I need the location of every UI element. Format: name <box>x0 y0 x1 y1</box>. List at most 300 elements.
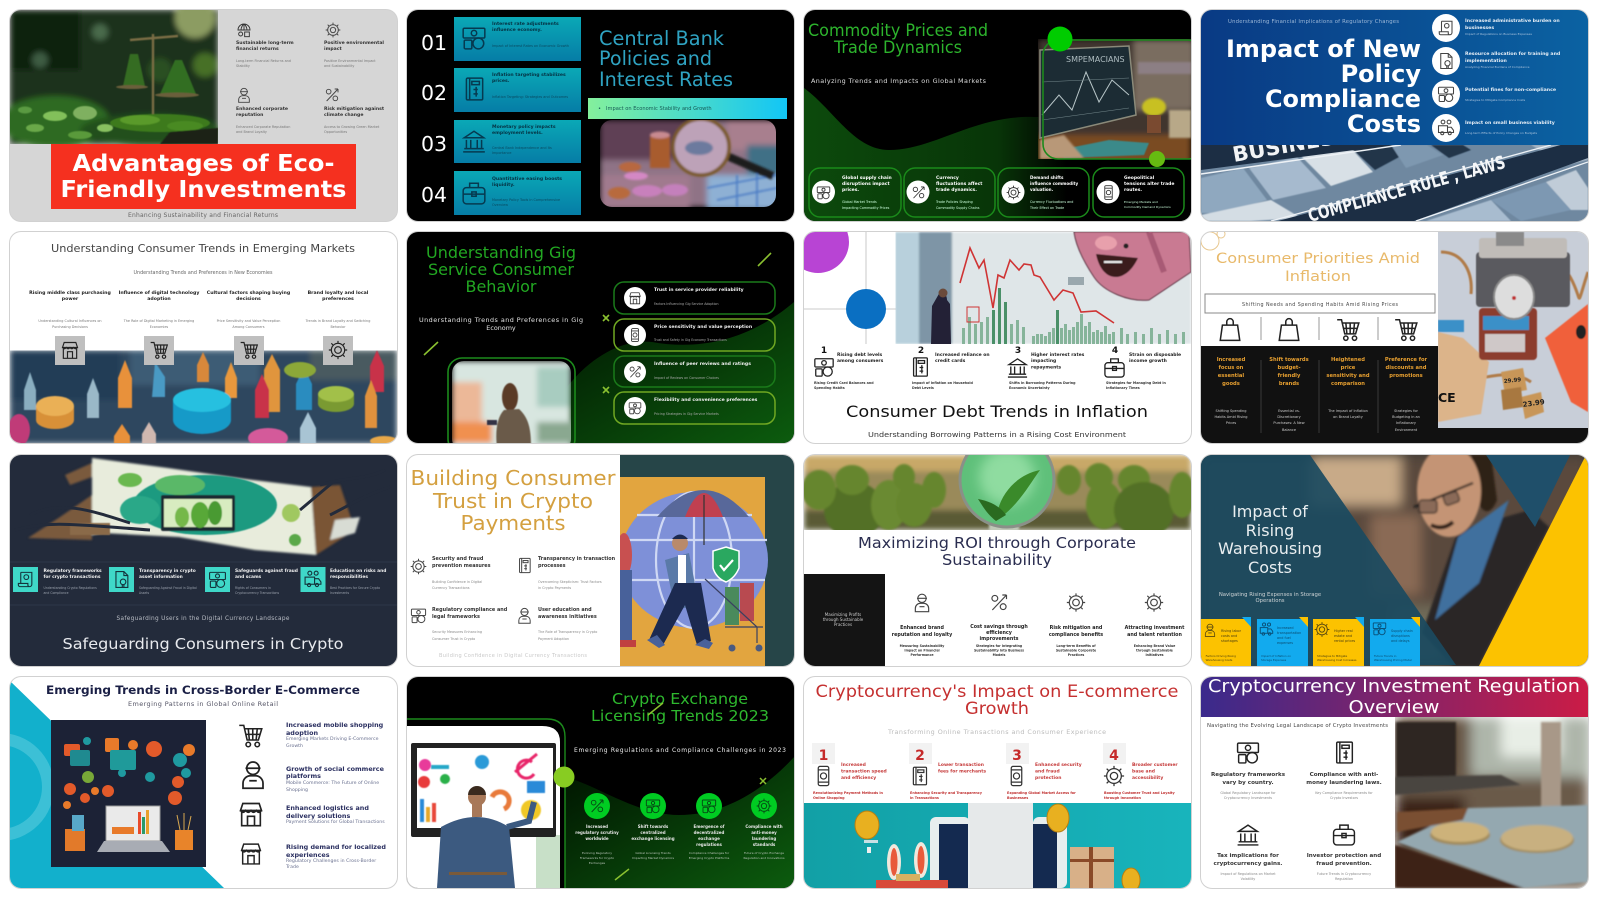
column 3: Among Consumers <box>232 325 265 329</box>
subtitle: Enhancing Sustainability and Financial Returns <box>128 212 278 219</box>
column 1: Rising middle class purchasing <box>29 290 111 296</box>
column 2: Sustainability into Business <box>974 648 1024 652</box>
title <box>1218 502 1322 577</box>
column 2: efficiency <box>986 630 1013 636</box>
list item 04: 04 <box>421 183 447 207</box>
item: decentralized <box>689 793 730 860</box>
title: Cryptocurrency's Impact on E-commerce <box>816 682 1178 701</box>
decorative bubbles <box>1201 230 1225 250</box>
title: Warehousing <box>1218 539 1322 558</box>
item 1: Spending Habits <box>814 386 845 390</box>
tile 2: Increased <box>1277 626 1294 630</box>
title: Understanding Gig <box>426 243 576 262</box>
item 2: Increased reliance on <box>935 352 990 358</box>
item: social commerce: platforms <box>286 772 321 780</box>
column 2: Balance <box>1282 428 1296 432</box>
column 4: promotions <box>1389 373 1423 379</box>
tile 3: Higher real <box>1334 629 1353 633</box>
title: Policies and <box>599 47 712 70</box>
geometric overlays <box>1201 455 1588 666</box>
title <box>599 27 733 91</box>
column 2: Discretionary <box>1277 415 1301 419</box>
subtitle: Understanding Financial Implications of Regulatory Changes <box>1228 19 1399 25</box>
title <box>816 682 1178 718</box>
step 1: transaction speed <box>841 768 887 774</box>
column 4: Enhancing Brand Value <box>1134 644 1175 648</box>
column 2: The Role of Digital Marketing in Emerging <box>123 319 194 323</box>
column 2: Economies <box>150 325 168 329</box>
tile 2: expenses <box>1277 641 1293 645</box>
subtitle <box>1219 592 1321 604</box>
list item 02: prices. <box>492 78 510 84</box>
column 3: decisions <box>236 296 261 302</box>
subtitle: Understanding Borrowing Patterns in a Rising Cost Environment <box>868 430 1126 439</box>
list item 01: 01 <box>421 31 447 55</box>
item: tax: cryptocurrency gains. <box>1214 861 1282 867</box>
item: safeguards: Safeguards against fraud <box>235 568 298 574</box>
image: coins on papers <box>1395 717 1588 888</box>
item: positive environmental impact: Positive Environmental Impact <box>324 59 376 63</box>
column 2: Purchases: A New <box>1273 421 1305 425</box>
item: localized experiences <box>242 843 386 870</box>
step 4: through Innovation <box>1104 796 1142 800</box>
item: administrative burden: Increased administrative burden on <box>1465 18 1560 24</box>
item: regulatory <box>411 607 508 641</box>
title: Consumer Priorities Amid <box>1216 251 1420 267</box>
column 4: preferences <box>322 296 354 302</box>
column 4: Inflationary <box>1396 421 1416 425</box>
item: tax <box>1214 825 1282 881</box>
item: localized experiences: experiences <box>286 851 330 859</box>
card: geopolitical <box>1093 168 1184 217</box>
item: risk mitigation <box>324 89 385 134</box>
item: regulatory frameworks: for crypto transactions <box>44 574 101 580</box>
item: positive environmental impact: impact <box>324 46 342 52</box>
column 3 <box>207 290 290 365</box>
step 1: Online Shopping <box>813 796 845 800</box>
gradient header title <box>1201 676 1588 718</box>
image: compliance rule bands <box>1201 123 1588 221</box>
list item 03 <box>421 120 581 163</box>
card: geopolitical: Geopolitical <box>1124 175 1155 181</box>
item: decentralized: Emergence of <box>694 824 725 829</box>
item: education: responsibilities <box>330 574 368 580</box>
item: investor protection: fraud prevention. <box>1316 861 1372 867</box>
subtitle: Transforming Online Transactions and Consumer Experience <box>887 728 1106 736</box>
step 3 <box>1006 743 1082 800</box>
item: AML: standards <box>753 842 776 847</box>
panel: Impact of New Policy Compliance Costs <box>1201 10 1588 221</box>
card: supply chain: Global Market Trends <box>842 200 877 204</box>
item: enhanced corporate reputation: reputation <box>236 112 263 118</box>
item: regulatory frameworks: and Compliance <box>44 591 69 595</box>
item: transparency: processes <box>538 563 566 569</box>
item: positive environmental impact <box>324 23 384 68</box>
step 2 <box>909 743 986 800</box>
column 3: Practices <box>1068 653 1084 657</box>
image: crypto coins and shopping <box>804 803 1191 888</box>
item: social commerce: Growth of social commerce <box>286 765 385 773</box>
item: investor protection: Future Trends in Cryptocurrency <box>1317 872 1371 876</box>
tile 4: and delays <box>1391 639 1410 643</box>
item 4: income growth <box>1129 358 1167 364</box>
list item 04: Monetary Policy Tools in Comprehensive <box>492 198 560 202</box>
tile 4 <box>1370 617 1420 666</box>
column 1: reputation and loyalty <box>892 632 953 638</box>
list item 04: Overview <box>492 203 508 207</box>
panel: Emerging Trends in Cross-Border E-Commerce <box>10 677 397 888</box>
panel: Safeguarding Consumers in Crypto <box>10 455 397 666</box>
item: localized experiences: Regulatory Challenges in Cross-Border <box>286 858 376 864</box>
item: small business viability: Long-term Effects of Policy Changes on Budgets <box>1465 131 1537 135</box>
panel: Understanding Gig Service Consumer Behavior <box>407 232 794 443</box>
item: risk mitigation: climate change <box>324 112 363 118</box>
title <box>591 690 769 725</box>
item 3: 3 <box>1015 346 1021 356</box>
item: enhanced corporate reputation <box>236 88 290 134</box>
card: supply chain <box>809 168 901 217</box>
column 3: sensitivity and <box>1326 373 1370 379</box>
item: social commerce: Mobile Commerce: The Future of Online <box>286 780 379 786</box>
item: transparency: in Crypto Payments <box>538 586 571 590</box>
item: transparency: Transparency in transaction <box>538 556 616 562</box>
list item 02 <box>421 68 581 112</box>
bottom black band <box>1201 346 1588 443</box>
tile 3: Strategies to Mitigate <box>1317 654 1348 658</box>
title: Compliance <box>1265 85 1421 113</box>
image: camera and price tags: 29.99 <box>1504 377 1522 385</box>
item: price: Trust and Safety in Gig Economy Transactions <box>653 338 727 342</box>
column 4: Preference for <box>1385 357 1428 363</box>
tile 2 <box>1257 617 1308 666</box>
step 1: 1 <box>819 748 828 764</box>
item: education <box>519 607 597 641</box>
item: regulatory frameworks: Global Regulatory Landscape for <box>1220 791 1276 795</box>
decorative accents <box>554 703 766 880</box>
title: Safeguarding Consumers in Crypto <box>62 635 344 653</box>
item: centralized licensing: Impacting Market Dynamics <box>632 856 674 860</box>
item: resource allocation: implementation <box>1465 58 1507 64</box>
step 4: accessibility <box>1132 775 1163 781</box>
item: education: awareness initiatives <box>538 614 597 620</box>
column 1 <box>892 594 953 657</box>
column 4 <box>305 290 370 365</box>
item: peer reviews <box>614 356 775 387</box>
item: security <box>411 556 491 590</box>
step 4 <box>1103 743 1178 800</box>
item: administrative burden <box>1432 14 1560 42</box>
card: currency: Commodity Supply Chains <box>936 206 980 210</box>
item: compliance: Compliance with anti- <box>1310 772 1379 778</box>
column 4: and talent retention <box>1127 632 1182 638</box>
item: safeguards: Rights of Consumers in <box>235 586 271 590</box>
image: camera and price tags: 23.99 <box>1522 398 1545 409</box>
column 2: improvements <box>980 636 1019 642</box>
item 2: Debt Levels <box>912 386 934 390</box>
item: AML: anti-money <box>751 830 777 835</box>
title: Growth <box>965 699 1029 718</box>
column 1: focus on <box>1219 365 1244 371</box>
item: scrutiny: Evolving Regulatory <box>582 851 612 855</box>
item: mobile shopping: Increased mobile shopping <box>286 721 384 729</box>
column 3: Cultural factors shaping buying <box>207 290 290 296</box>
item: logistics: delivery solutions <box>286 812 350 820</box>
column 1 <box>29 290 111 365</box>
item: logistics: Enhanced logistics and <box>286 804 369 812</box>
blue header panel <box>1201 10 1588 145</box>
step 4: Boosting Customer Trust and Loyalty <box>1104 791 1176 795</box>
item: investor protection: Regulation <box>1335 877 1353 881</box>
tile 2: Storage Expenses <box>1261 658 1287 662</box>
title: Interest Rates <box>599 68 733 91</box>
tile 2: Impact of Inflation on <box>1261 654 1291 658</box>
footer note: Building Confidence in Digital Currency Transactions <box>439 653 587 659</box>
item: tax: Tax implications for <box>1217 853 1279 859</box>
list item 01: Interest rate adjustments <box>492 21 559 27</box>
gradient header title: Overview <box>1348 697 1440 718</box>
tile 1: costs and <box>1221 634 1237 638</box>
side box: Practices <box>834 622 852 627</box>
list item 03: employment levels. <box>492 130 543 136</box>
subtitle: Navigating the Evolving Legal Landscape of Crypto Investments <box>1207 723 1388 729</box>
list item 01: Impact of Interest Rates on Economic Growth <box>492 44 569 48</box>
column 4: discounts and <box>1386 365 1427 371</box>
image: coins and magnifier <box>600 120 776 207</box>
title <box>426 243 576 296</box>
column 2: friendly <box>1278 373 1301 379</box>
item: price: Price sensitivity and value perception <box>654 324 752 330</box>
item: transparency <box>109 567 197 595</box>
card: currency: fluctuations affect <box>936 181 983 187</box>
item: regulatory: Regulatory compliance and <box>432 607 508 613</box>
title: Sustainability <box>942 551 1052 569</box>
image: woman with dashboards <box>448 358 577 453</box>
side box <box>804 574 885 666</box>
card: supply chain: Impacting Commodity Prices <box>842 206 890 210</box>
column 1: Prices <box>1226 421 1236 425</box>
image: camera and price tags <box>1438 232 1588 428</box>
item: education: Payment Adoption <box>538 637 569 641</box>
item: scrutiny: Increased <box>586 824 608 829</box>
item 1: 1 <box>821 346 827 356</box>
card: geopolitical: routes. <box>1124 187 1142 193</box>
column 1: Shifting Spending <box>1216 409 1246 413</box>
column 3: The Impact of Inflation <box>1327 409 1368 413</box>
item: social commerce: Shopping <box>286 787 308 793</box>
subtitle: Analyzing Trends and Impacts on Global Markets <box>811 77 987 85</box>
item 4: Strain on disposable <box>1129 352 1181 358</box>
item: education: User education and <box>538 607 592 613</box>
card: currency <box>904 168 995 217</box>
column 3: on Brand Loyalty <box>1333 415 1363 419</box>
decorative green dots <box>1048 26 1165 167</box>
item: regulatory frameworks: vary by country. <box>1222 780 1274 786</box>
step 4: base and <box>1132 768 1155 774</box>
item: decentralized: decentralized <box>694 830 724 835</box>
item 4 <box>1105 346 1181 390</box>
item: positive environmental impact: and Sustainability <box>324 64 354 68</box>
step 1: and efficiency <box>841 775 876 781</box>
column 4: Attracting investment <box>1125 625 1185 631</box>
item: sustainable long-term returns: Sustainable long-term <box>236 40 294 46</box>
step 4: Broader customer <box>1132 762 1178 768</box>
item: decentralized: exchange <box>698 836 720 841</box>
image: shopper under umbrella <box>620 455 794 666</box>
tile 2: and fuel <box>1277 636 1291 640</box>
card: currency: Currency <box>936 175 959 181</box>
item: investor protection: Investor protection and <box>1307 853 1381 859</box>
title banner <box>51 144 356 209</box>
item: mobile shopping: Growth <box>286 743 303 749</box>
item: mobile shopping: adoption <box>286 729 318 737</box>
item: regulatory: legal frameworks <box>432 614 480 620</box>
column 2: brands <box>1279 381 1299 387</box>
column 1: Performance <box>910 653 934 657</box>
item: administrative burden: Impact of Regulations on Business Expenses <box>1465 32 1532 36</box>
step 2: 2 <box>915 748 925 764</box>
title: Impact of <box>1232 502 1308 521</box>
title: Inflation <box>1285 269 1351 285</box>
column 1: Increased <box>1217 357 1246 363</box>
title: Building Consumer <box>410 466 616 490</box>
list item 04: Quantitative easing boosts <box>492 176 562 182</box>
item: compliance: Crypto Investors <box>1330 796 1358 800</box>
card: demand: Currency Fluctuations and <box>1030 200 1073 204</box>
column 2: Models <box>993 653 1005 657</box>
item: enhanced corporate reputation: Enhanced corporate <box>236 106 288 112</box>
item: compliance <box>1306 742 1382 800</box>
cyan wedge <box>0 681 224 888</box>
column 2: Essential vs. <box>1278 409 1300 413</box>
item: price <box>614 319 775 351</box>
bullet bar: Impact on Economic Stability and Growth <box>606 106 712 112</box>
item: safeguards: and scams <box>235 574 262 580</box>
card: demand: influence commodity <box>1030 181 1078 186</box>
item: logistics: Payment Solutions for Global Transactions <box>286 819 385 825</box>
column 3: Long-term Benefits of <box>1056 644 1096 648</box>
tile 4: disruptions <box>1391 634 1410 638</box>
tile 4: Future Trends in <box>1374 654 1397 658</box>
item: potential fines: Potential fines for non-compliance <box>1465 87 1556 93</box>
item: transparency: Safeguarding Against Fraud in Digital <box>139 586 197 590</box>
item: administrative burden: businesses <box>1465 25 1494 31</box>
item: trust <box>614 282 775 314</box>
column 4: through Sustainable <box>1136 648 1173 652</box>
column 3: Heightened <box>1331 357 1365 363</box>
item: AML <box>743 793 785 860</box>
item: localized experiences: Rising demand for localized <box>286 843 386 851</box>
step 2: fees for merchants <box>938 768 986 774</box>
item: safeguards <box>205 567 298 595</box>
item: tax: Impact of Regulations on Market <box>1220 872 1276 876</box>
item: mobile shopping: Emerging Markets Driving E-Commerce <box>286 736 379 742</box>
item 3: Shifts in Borrowing Patterns During <box>1009 381 1076 385</box>
item: sustainable long-term returns: Stability <box>236 64 250 68</box>
card: geopolitical: tensions alter trade <box>1124 181 1174 187</box>
item: security: Security and fraud <box>432 556 484 562</box>
item 3: impacting <box>1031 358 1056 364</box>
column 1: goods <box>1222 381 1240 387</box>
step 3: protection <box>1035 775 1061 781</box>
title: Understanding Consumer Trends in Emerging Markets <box>51 243 355 255</box>
item: decentralized: Compliance Challenges for <box>689 851 730 855</box>
green wave background <box>565 755 796 888</box>
item 2: credit cards <box>935 358 966 364</box>
item: security: prevention measures <box>432 563 491 569</box>
green wave background <box>537 302 794 443</box>
panel: Impact of Rising Warehousing Costs <box>1201 455 1588 666</box>
item 2: 2 <box>918 346 924 356</box>
subtitle: Understanding Trends and Preferences in New Economies <box>134 270 273 276</box>
title: Service Consumer <box>428 260 574 279</box>
item: centralized licensing <box>631 793 675 860</box>
item: compliance: Key Compliance Requirements for <box>1315 791 1373 795</box>
title: Maximizing ROI through Corporate <box>858 534 1136 552</box>
column 2 <box>119 290 199 365</box>
column 4 <box>1125 593 1185 657</box>
item: regulatory: Security Measures Enhancing <box>432 630 482 634</box>
panel: Cryptocurrency's Impact on E-commerce Growth <box>804 677 1191 888</box>
title: Licensing Trends 2023 <box>591 707 769 725</box>
list item 04 <box>421 171 581 215</box>
item: sustainable long-term returns: Long-term Financial Returns and <box>236 59 291 63</box>
card: geopolitical: Emerging Markets and <box>1124 200 1158 204</box>
image: camera and price tags: CE <box>1438 390 1456 405</box>
title: Behavior <box>466 277 537 296</box>
card: geopolitical: Commodity Demand Dynamics <box>1124 205 1171 209</box>
tile 1: Factors Driving Rising <box>1206 654 1236 658</box>
item 3: repayments <box>1031 364 1061 370</box>
step 4: 4 <box>1109 748 1119 764</box>
subtitle: Emerging Patterns in Global Online Retail <box>128 700 278 708</box>
item 4: 4 <box>1112 346 1118 356</box>
item: risk mitigation: Risk mitigation against <box>324 106 385 112</box>
item: regulatory frameworks: Understanding Crypto Regulations <box>44 586 97 590</box>
image: debt chart with pig <box>896 232 1191 344</box>
title: Commodity Prices and <box>808 21 988 41</box>
item: positive environmental impact: Positive environmental <box>324 40 384 46</box>
item: social commerce <box>243 762 385 793</box>
list item 03: 03 <box>421 132 447 156</box>
item: flexibility <box>614 392 775 424</box>
item: regulatory frameworks: Regulatory frameworks <box>1211 772 1286 778</box>
side box: Maximizing Profits <box>825 612 861 617</box>
tile 1: Warehousing Costs <box>1206 658 1233 662</box>
decorative dashes <box>424 253 771 393</box>
column 1: Purchasing Decisions <box>52 325 88 329</box>
title: Rising <box>1246 521 1294 540</box>
item 4: Strategies for Managing Debt in <box>1106 381 1167 385</box>
item: education <box>300 567 386 595</box>
column 3: compliance benefits <box>1049 632 1103 638</box>
tile 3 <box>1313 617 1364 666</box>
column 3: Price Sensitivity and Value Perception <box>217 319 280 323</box>
list item 03: Central Bank Independence and Its <box>492 146 552 150</box>
tile 4: Warehousing Pricing Model <box>1374 658 1412 662</box>
item: sustainable long-term returns: financial returns <box>236 46 279 52</box>
subtitle: Understanding Trends and Preferences in Gig <box>419 316 583 324</box>
item: resource allocation <box>1432 47 1560 75</box>
list item 04: liquidity. <box>492 182 515 188</box>
item: security: Currency Transactions <box>432 586 470 590</box>
subtitle: Navigating Rising Expenses in Storage <box>1219 592 1321 598</box>
card: demand: Demand shifts <box>1030 175 1064 180</box>
item: tax: Volatility <box>1241 877 1255 881</box>
image: eco scales in foliage <box>10 10 218 144</box>
item 2: Impact of Inflation on Household <box>912 381 974 385</box>
step 1: Revolutionizing Payment Methods in <box>813 791 884 795</box>
item: regulatory frameworks: Cryptocurrency Investments <box>1224 796 1272 800</box>
